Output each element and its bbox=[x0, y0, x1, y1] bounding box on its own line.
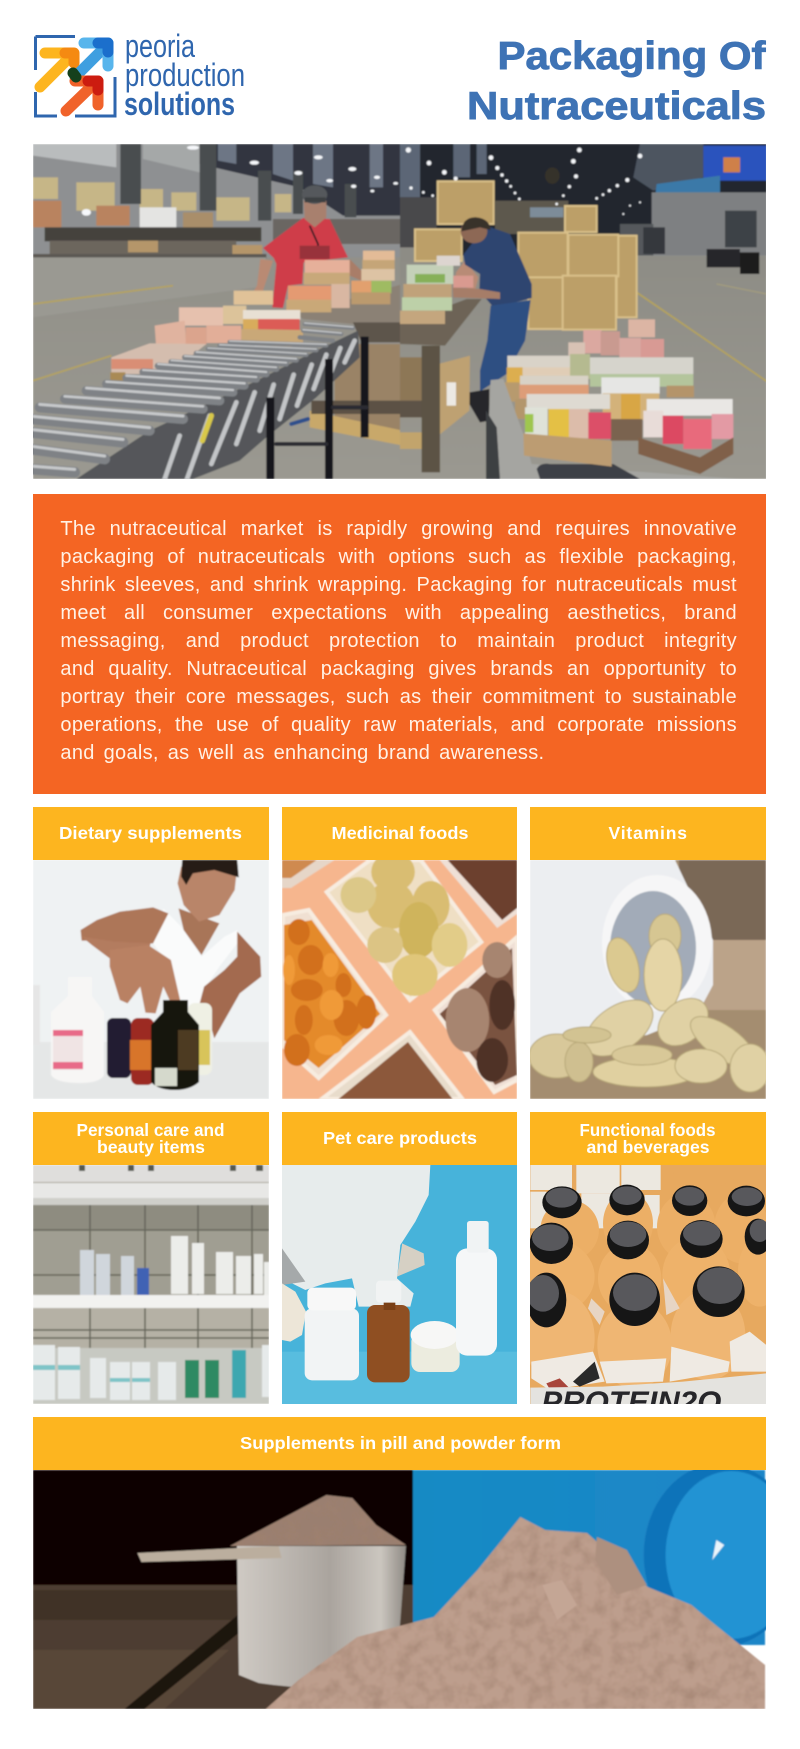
panel: intro text: packaging of nutraceuticals with options such as flexible packaging, bbox=[60, 546, 737, 568]
almond tray bbox=[322, 1032, 462, 1099]
cart bbox=[486, 379, 740, 479]
logo arrow: orange bbox=[66, 73, 98, 111]
product cases on table bbox=[110, 251, 395, 381]
card 5 header: Pet care products: Pet care products bbox=[323, 1128, 477, 1148]
panel: intro text bbox=[33, 494, 766, 794]
wide header: Supplements in pill and powder form bbox=[33, 1417, 766, 1470]
logo arrow: yellow bbox=[40, 53, 74, 87]
tank top bbox=[154, 910, 237, 1006]
card 2 header: Medicinal foods: Medicinal foods bbox=[332, 823, 469, 843]
arm left bbox=[81, 907, 168, 946]
title bbox=[467, 35, 767, 128]
card 4 photo: cosmetic shelves bbox=[33, 1165, 269, 1404]
arm right bbox=[198, 932, 261, 1038]
panel: intro text: messaging, and product protection to maintain product integrity bbox=[60, 630, 737, 652]
card 5 photo: dog with bottles bbox=[282, 1165, 517, 1405]
packages on table bbox=[407, 265, 453, 284]
panel: intro text: and quality. Nutraceutical packaging gives brands an opportunity to bbox=[60, 658, 737, 680]
bottle bbox=[530, 860, 713, 1060]
head bbox=[178, 867, 237, 922]
bottle bodies bbox=[540, 1192, 769, 1263]
centre tray bbox=[327, 860, 481, 1000]
panel: intro text: The nutraceutical market is rapidly growing and requires innovative bbox=[60, 518, 737, 540]
tablets bbox=[529, 914, 770, 1092]
lower labels bbox=[531, 1332, 766, 1390]
panel: intro text: portray their core messages, such as their commitment to sustainable bbox=[60, 686, 737, 708]
upper warehouse right bbox=[400, 144, 767, 256]
panel: intro text: shrink sleeves, and shrink wrapping. Packaging for nutraceuticals must bbox=[60, 574, 737, 596]
card 1 photo: man with supplement bottles bbox=[33, 860, 269, 1099]
title: Nutraceuticals bbox=[467, 85, 766, 128]
wide header: Supplements in pill and powder form: Supplements in pill and powder form bbox=[240, 1433, 561, 1453]
floor stripes bbox=[33, 286, 173, 381]
card 6 header: Functional foods and beverages: and beverages bbox=[586, 1137, 710, 1157]
logo wordmark bbox=[124, 28, 245, 122]
jar bbox=[411, 1333, 460, 1372]
card 6 header: Functional foods and beverages bbox=[530, 1112, 766, 1165]
card 6 photo: protein drink bottles: PROTEIN2O bbox=[541, 1385, 721, 1419]
tall bottle bbox=[456, 1248, 497, 1356]
card 3 header: Vitamins: Vitamins bbox=[608, 823, 687, 843]
apricot tray bbox=[282, 910, 386, 1078]
table top left part bbox=[296, 284, 403, 324]
floor product: white and green bbox=[503, 354, 694, 441]
card 1 header: Dietary supplements bbox=[33, 807, 269, 860]
worker in blue shirt bbox=[453, 217, 532, 422]
top labels bbox=[530, 1165, 661, 1228]
floor right bbox=[400, 256, 767, 479]
hero photo: warehouse packing bbox=[30, 144, 767, 479]
roller conveyor bbox=[30, 323, 366, 479]
carton bbox=[530, 1373, 766, 1405]
blue shaker cup bbox=[644, 1463, 799, 1647]
logo frame bbox=[36, 36, 115, 116]
wide photo: protein powder and scoop bbox=[33, 1463, 799, 1709]
title: Packaging Of bbox=[498, 35, 767, 78]
logo wordmark: production bbox=[125, 57, 245, 93]
hand bbox=[110, 945, 182, 1013]
worker in red shirt bbox=[248, 185, 366, 308]
floor product: pink cases bbox=[568, 319, 664, 361]
crates bbox=[415, 181, 637, 330]
card 4 header: Personal care and beauty items: Personal care and bbox=[76, 1120, 224, 1140]
logo wordmark: solutions bbox=[124, 86, 235, 122]
case of mixed bottles bbox=[523, 394, 612, 467]
card 2 header: Medicinal foods bbox=[282, 807, 517, 860]
forearm bbox=[86, 940, 152, 959]
card 4 header: Personal care and beauty items bbox=[33, 1112, 269, 1165]
stacked product beside conveyor bbox=[179, 307, 223, 326]
card 2 photo: food trays bbox=[282, 852, 517, 1099]
packing table bbox=[400, 299, 482, 346]
panel: intro text: meet all consumer expectations with appealing aesthetics, brand bbox=[60, 602, 737, 624]
card 3 photo: spilled tablets bbox=[529, 860, 770, 1099]
caps bbox=[526, 1185, 771, 1327]
amber bottle bbox=[367, 1305, 410, 1382]
neck bbox=[179, 908, 219, 955]
logo bbox=[36, 28, 245, 122]
logo arrow: blue bbox=[75, 43, 108, 77]
case of red label bottles bbox=[638, 399, 733, 474]
card 6 photo: protein drink bottles bbox=[505, 1162, 781, 1419]
white tub bbox=[305, 1308, 359, 1380]
card 5 header: Pet care products bbox=[282, 1112, 517, 1165]
scoop bbox=[237, 1546, 406, 1688]
card 4 header: Personal care and beauty items: beauty items bbox=[97, 1137, 205, 1157]
panel: intro text: and goals, as well as enhancing brand awareness. bbox=[60, 742, 544, 764]
bottles bbox=[34, 986, 40, 1042]
dog bbox=[397, 1243, 425, 1277]
dates tray bbox=[435, 937, 517, 1092]
card 6 header: Functional foods and beverages: Functional foods bbox=[580, 1120, 716, 1140]
powder pile bbox=[266, 1517, 765, 1709]
logo wordmark: peoria bbox=[125, 28, 195, 64]
card 1 header: Dietary supplements: Dietary supplements bbox=[59, 823, 242, 843]
panel: intro text: operations, the use of quality raw materials, and corporate missions bbox=[60, 714, 737, 736]
card 3 header: Vitamins bbox=[530, 807, 766, 860]
